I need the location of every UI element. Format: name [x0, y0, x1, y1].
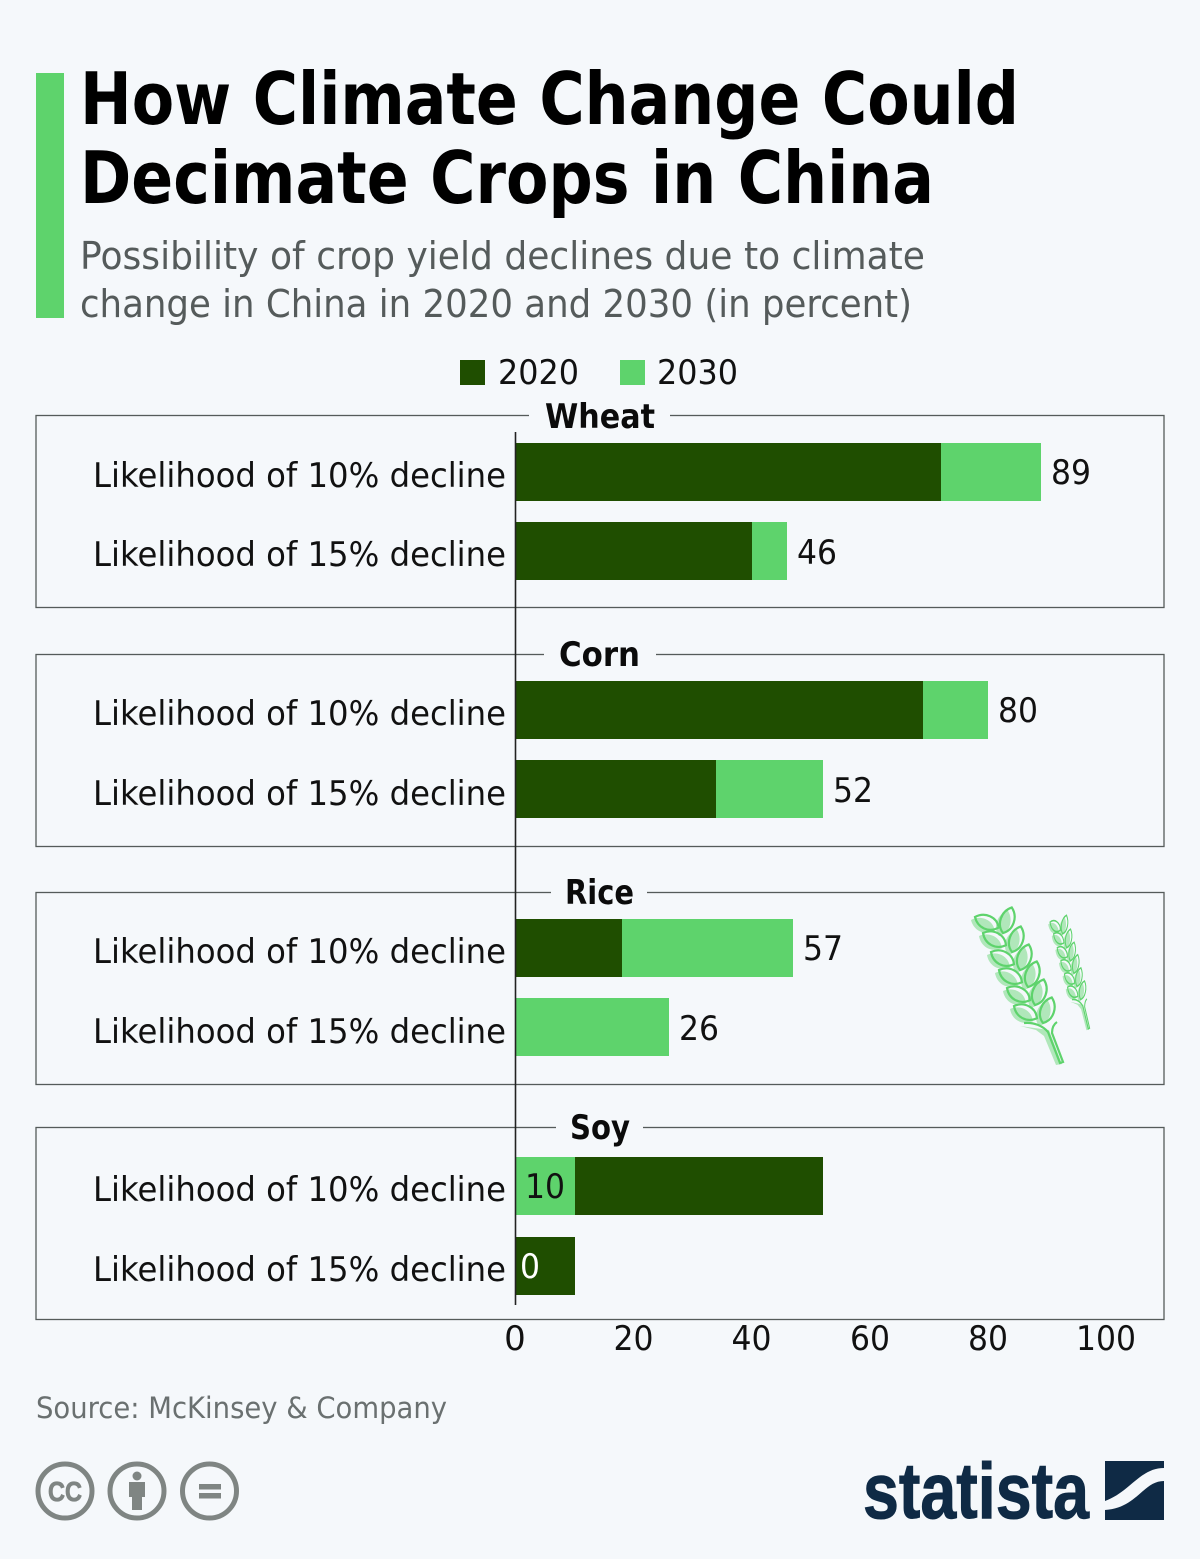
title: Decimate Crops in China	[80, 136, 934, 220]
title accent bar	[36, 73, 64, 318]
row: soy 15% decline	[93, 1237, 575, 1295]
row: corn 15% decline: Likelihood of 15% decline	[93, 774, 506, 814]
icon: cc license	[38, 1464, 92, 1518]
row: rice 15% decline: 26	[679, 1009, 719, 1049]
x axis labels: 20	[614, 1319, 654, 1359]
row: corn 15% decline	[93, 760, 873, 818]
title	[80, 57, 1019, 220]
x axis labels	[504, 1319, 1136, 1359]
icon: attribution	[110, 1464, 164, 1518]
row: wheat 10% decline: Likelihood of 10% decline	[93, 456, 506, 496]
icon: cc license: CC	[48, 1476, 82, 1507]
subtitle	[80, 234, 925, 326]
row: rice 10% decline: 57	[803, 929, 843, 969]
row: wheat 15% decline: 46	[797, 533, 837, 573]
row: rice 15% decline	[93, 998, 719, 1056]
panel: soy	[36, 1108, 1164, 1320]
row: corn 15% decline: 52	[833, 771, 873, 811]
legend	[460, 353, 738, 393]
panel: wheat	[36, 397, 1164, 608]
row: soy 10% decline: 10	[525, 1167, 565, 1207]
x axis labels: 80	[968, 1319, 1008, 1359]
row: soy 15% decline: Likelihood of 15% decline	[93, 1250, 506, 1290]
legend: 2020	[498, 353, 579, 393]
row: wheat 10% decline	[93, 443, 1091, 501]
title: How Climate Change Could	[80, 57, 1019, 141]
x axis labels: 40	[732, 1319, 772, 1359]
panel: rice	[36, 873, 1164, 1084]
legend: 2030	[657, 353, 738, 393]
row: rice 10% decline: Likelihood of 10% decline	[93, 932, 506, 972]
subtitle: change in China in 2020 and 2030 (in percent)	[80, 282, 912, 326]
x axis labels: 0	[504, 1319, 526, 1359]
source: Source: McKinsey & Company	[36, 1391, 447, 1425]
statista logo: statista	[863, 1446, 1090, 1535]
subtitle: Possibility of crop yield declines due to climate	[80, 234, 925, 278]
heading: wheat: Wheat	[545, 397, 655, 437]
row: wheat 10% decline: 89	[1051, 453, 1091, 493]
row: wheat 15% decline	[93, 522, 837, 580]
icon: wheat ears	[968, 905, 1090, 1065]
row: soy 10% decline	[93, 1157, 823, 1215]
row: wheat 15% decline: Likelihood of 15% decline	[93, 535, 506, 575]
heading: soy: Soy	[570, 1108, 630, 1148]
icon: no derivatives	[182, 1464, 236, 1518]
x axis labels: 100	[1076, 1319, 1136, 1359]
panel: corn	[36, 635, 1164, 846]
row: corn 10% decline: Likelihood of 10% decline	[93, 694, 506, 734]
row: corn 10% decline: 80	[998, 691, 1038, 731]
row: soy 10% decline: Likelihood of 10% decline	[93, 1170, 506, 1210]
x axis labels: 60	[850, 1319, 890, 1359]
heading: rice: Rice	[565, 873, 634, 913]
heading: corn: Corn	[559, 635, 640, 675]
row: soy 15% decline: 0	[520, 1247, 540, 1287]
row: rice 15% decline: Likelihood of 15% decline	[93, 1012, 506, 1052]
row: corn 10% decline	[93, 681, 1038, 739]
row: rice 10% decline	[93, 919, 843, 977]
axis line	[514, 432, 516, 1305]
